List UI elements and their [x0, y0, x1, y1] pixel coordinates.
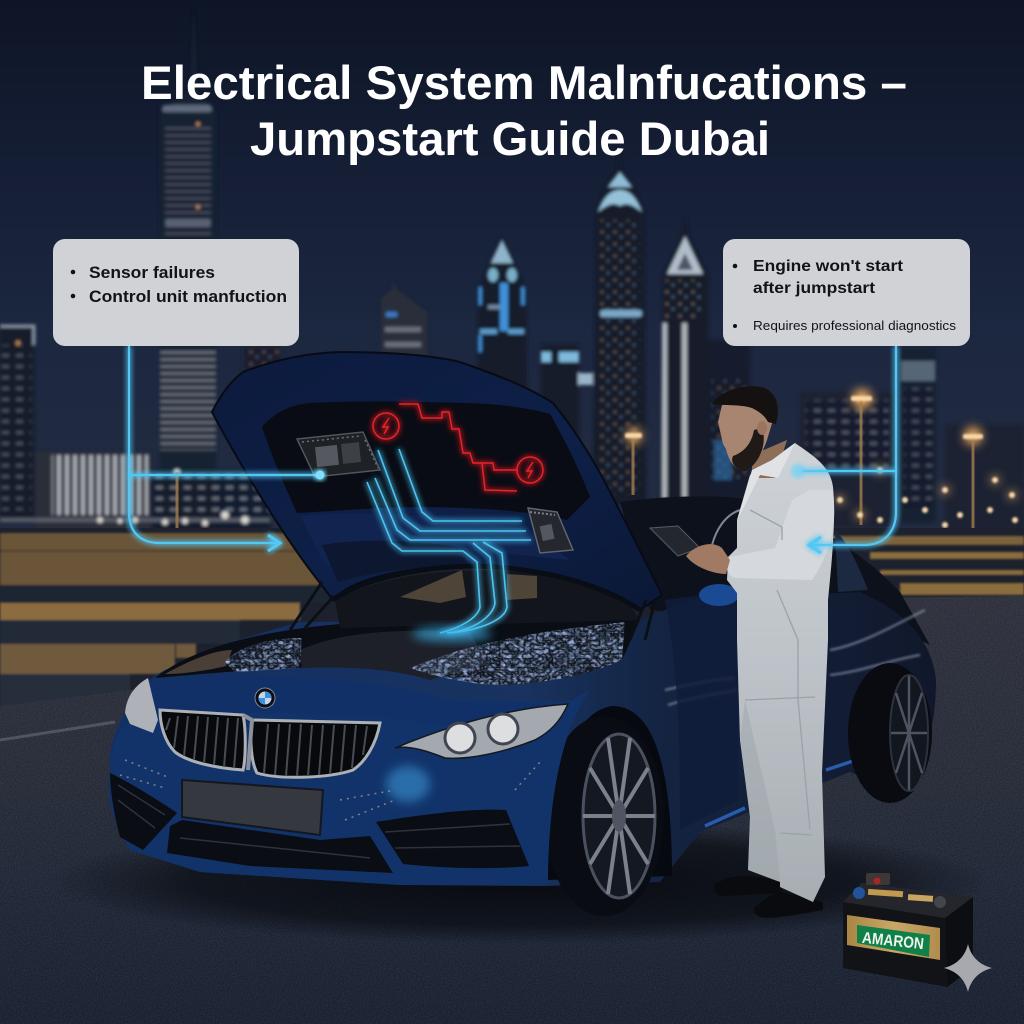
battery: green badge: [857, 925, 930, 957]
tower: tall left skyscraper: [160, 5, 216, 530]
mechanic: beard: [732, 428, 764, 471]
callout: right issues: [723, 239, 970, 346]
mechanic: sleeve: [727, 490, 834, 580]
battery: top cover: [843, 883, 973, 918]
mechanic: hands: [686, 544, 730, 574]
car: kidney grille: [160, 710, 380, 777]
car: window frame arc: [712, 510, 740, 545]
engine bay: right parts: [410, 622, 625, 685]
sparkle watermark: [944, 944, 992, 992]
car: glass under hood: [335, 570, 640, 628]
battery: front face: [843, 902, 947, 987]
car: number plate: [182, 780, 323, 835]
hood: bottom edge shading: [333, 566, 640, 610]
towers: centre skyline: [381, 153, 750, 505]
hood: dark recess: [322, 541, 467, 582]
car: BMW sedan: [109, 352, 936, 916]
battery: gold label: [847, 915, 940, 960]
car: main body: [109, 592, 936, 886]
bullet list: right: Engine won't start: [753, 258, 904, 275]
title: Jumpstart Guide Dubai: [250, 112, 770, 165]
towers: right skyline: [800, 348, 1024, 530]
city lights strip left: [0, 469, 270, 526]
battery: brand text: AMARON: [861, 930, 925, 953]
car: open hood: [212, 352, 662, 640]
tower: twin crown: [478, 237, 527, 395]
bullet list: right: [733, 258, 956, 333]
shoulder glow node: [791, 464, 805, 478]
car: front wheel: [544, 716, 664, 916]
building: small lit block: [541, 345, 593, 440]
battery: AMARON: [843, 873, 973, 987]
car: sill highlight: [705, 758, 862, 826]
wiring overlay: left connector from callout: [129, 346, 320, 551]
car: right headlight: [395, 704, 568, 758]
background: asphalt road: [0, 596, 1024, 1024]
icon: fault bolt right: [517, 457, 543, 483]
icon: fault bolt left: [373, 413, 399, 439]
wiring overlay: control unit 1: [297, 432, 380, 477]
bullet list: left: [71, 264, 287, 306]
car: bumper scratches: [120, 760, 540, 820]
tower: triangle crown: [660, 217, 708, 505]
mechanic: hair: [712, 386, 778, 424]
wiring overlay: control unit 2: [528, 508, 573, 553]
arrowhead: left: [268, 535, 280, 551]
mechanic: neck: [752, 440, 787, 478]
car shadow on ground: [50, 820, 990, 944]
background: night sky: [0, 0, 1024, 600]
building: low wide left block: [36, 345, 283, 530]
tower: slanted roof: [381, 280, 427, 365]
battery: terminals: [853, 873, 946, 908]
car: rear quarter reflections: [665, 610, 925, 705]
mechanic: collar: [737, 443, 795, 520]
car: front wheel arch: [545, 706, 672, 880]
engine bay: left parts: [225, 638, 302, 672]
mechanic: ear: [757, 421, 767, 435]
car: front bumper: [109, 690, 590, 885]
connector node on control unit: [316, 470, 324, 480]
battery: side face: [945, 897, 973, 987]
wiring overlay: blue signal lines: [367, 449, 531, 633]
tower: tall crown: [593, 153, 646, 505]
mechanic: man in white coverall: [650, 386, 834, 918]
bullet list: left: Control unit manfuction: [89, 288, 287, 306]
mechanic: face: [718, 401, 773, 470]
mechanic: leg shading: [740, 700, 780, 882]
car: BMW roundel: [255, 688, 275, 708]
hood: struts: [290, 582, 655, 640]
mechanic: tablet: [650, 526, 700, 556]
tower: far left: [0, 325, 34, 520]
car: bonnet leading edge: [150, 677, 568, 726]
engine bay: brown reflection lip: [165, 650, 232, 674]
wiring overlay: right connector from callout: [802, 346, 896, 553]
title: [141, 56, 907, 165]
wiring overlay: glow over engine: [412, 627, 492, 641]
engine bay: engine cover: [300, 631, 488, 680]
car: roof and side windows: [620, 496, 930, 645]
car: lower intakes: [110, 773, 529, 873]
car: side mirror: [699, 584, 739, 606]
car: engine bay: [155, 620, 640, 685]
hood: lower channel: [300, 514, 570, 565]
mechanic: coverall folds: [745, 510, 815, 835]
mechanic: shoes: [714, 876, 823, 918]
car: left headlight: [125, 678, 158, 733]
background: Dubai skyline: [0, 5, 1024, 530]
callout: left issues: [53, 239, 299, 346]
tower: behind mechanic: [708, 340, 750, 500]
bullet list: right: Requires professional diagnostics: [753, 319, 956, 333]
background: highway and guard rails: [0, 528, 1024, 708]
car: rear wheel: [848, 663, 932, 803]
hood: dark inner liner: [262, 401, 590, 520]
wiring overlay: red fault circuit: [373, 404, 543, 491]
arrowhead: right: [809, 537, 821, 553]
car: amber reflection in windshield: [400, 570, 537, 603]
car: bumper highlight: [386, 766, 430, 802]
background: street lamps and bokeh lights: [177, 389, 1018, 530]
mechanic: coverall body: [727, 443, 834, 902]
bullet list: left: Sensor failures: [89, 264, 215, 282]
title: Electrical System Malnfucations –: [141, 56, 907, 109]
bullet list: right: after jumpstart: [753, 280, 876, 297]
car: intake slats: [118, 785, 520, 858]
car: door panel shading: [665, 590, 738, 830]
car: rear side window: [835, 530, 868, 592]
